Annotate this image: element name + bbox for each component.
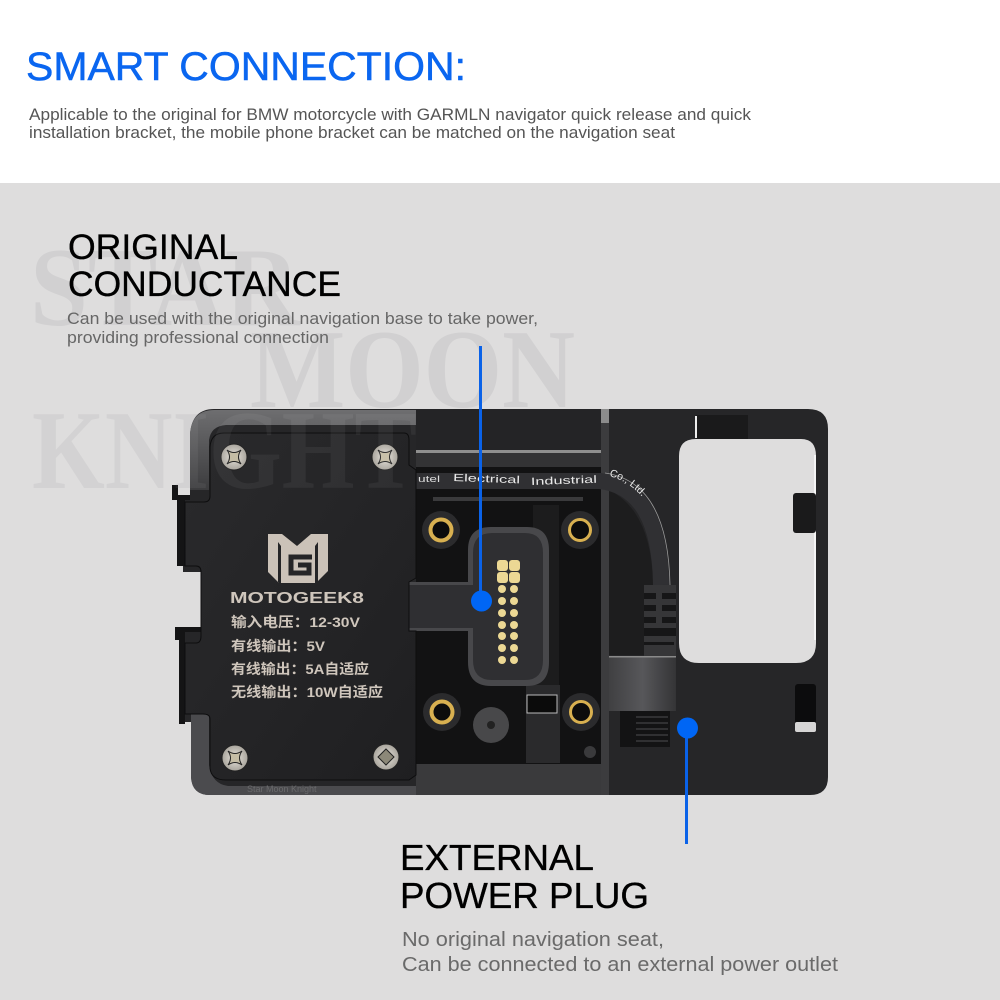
heading: external power plug: POWER PLUG [400, 875, 649, 916]
connector pins [497, 560, 520, 664]
window edge highlight [814, 455, 816, 640]
text: external power plug description: No original navigation seat, [402, 928, 664, 951]
text: original conductance description: providing professional connection [67, 328, 329, 347]
specification text: 有线输出：5V [231, 638, 326, 654]
heading: external power plug [400, 837, 649, 916]
bracket right tab [793, 493, 816, 533]
left slot showing background [176, 572, 201, 628]
intro text: installation bracket, the mobile phone bracket can be matched on the navigation seat [29, 124, 675, 142]
text: original conductance description [67, 309, 538, 347]
logo [268, 534, 328, 583]
brand name: MOTOGEEK8 [230, 590, 365, 607]
left clips [172, 485, 201, 724]
callout line: original conductance [471, 346, 492, 612]
watermark [30, 226, 575, 513]
heading: external power plug: EXTERNAL [400, 837, 594, 878]
phone window [679, 439, 816, 663]
title: SMART CONNECTION: [26, 45, 466, 89]
power plug [609, 585, 676, 747]
wireless module cover [185, 433, 416, 794]
cable with printed text [416, 470, 670, 655]
left shell highlight [190, 410, 416, 490]
cable with printed text: Industrial [531, 474, 597, 488]
cover screws [221, 444, 399, 771]
text: external power plug description [402, 928, 838, 976]
bracket top tab [696, 415, 748, 439]
heading: original conductance [68, 228, 341, 304]
small watermark: Star Moon Knight [247, 784, 317, 794]
intro text [29, 106, 752, 142]
bracket body [183, 409, 828, 795]
bracket slot [795, 684, 816, 732]
small latch [527, 695, 557, 713]
specification text: 有线输出：5A自适应 [231, 661, 369, 677]
cable with printed text: utel [418, 474, 440, 485]
heading: original conductance: ORIGINAL [68, 228, 238, 267]
text: original conductance description: Can be used with the original navigation base to take power, [67, 309, 538, 328]
watermark: KNIGHT [32, 389, 417, 513]
watermark overlay on device: KNIGHT [32, 389, 417, 513]
brass screw inserts [422, 511, 600, 758]
intro text: Applicable to the original for BMW motorcycle with GARMLN navigator quick release and quick [29, 106, 752, 124]
watermark: STAR [30, 226, 301, 350]
cable with printed text: Electrical [453, 472, 520, 486]
magnetic connector [408, 527, 549, 686]
heading: original conductance: CONDUCTANCE [68, 265, 341, 304]
text: external power plug description: Can be connected to an external power outlet [402, 953, 838, 976]
central tray [416, 409, 609, 795]
specification text: 无线输出：10W自适应 [231, 684, 383, 700]
watermark: MOON [250, 308, 575, 432]
callout line: external power plug [677, 718, 698, 844]
specification text [231, 614, 383, 700]
cable with printed text: Co., Ltd. [610, 470, 645, 496]
specification text: 输入电压：12-30V [231, 614, 361, 630]
device: phone bracket module [32, 346, 838, 976]
